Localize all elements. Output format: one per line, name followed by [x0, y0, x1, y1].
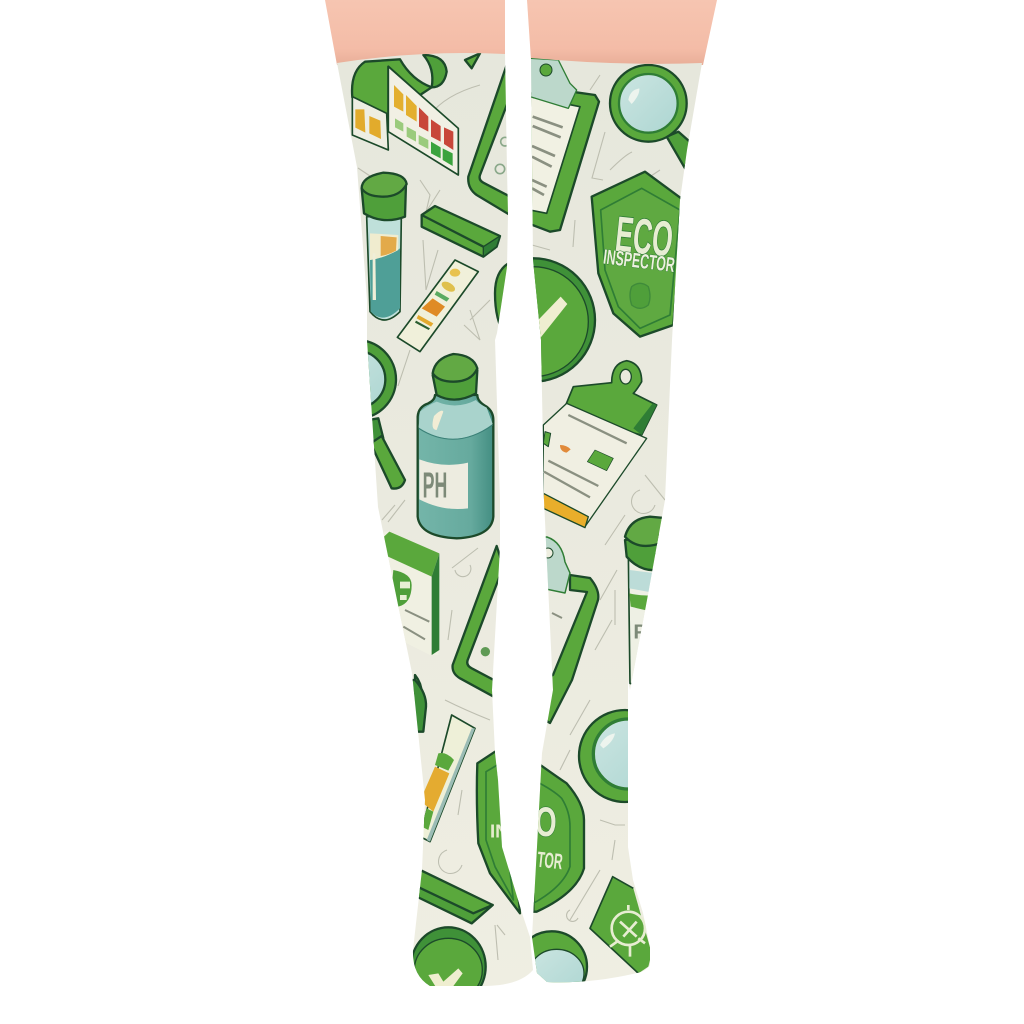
check circle — [412, 926, 487, 986]
green bar — [422, 206, 500, 257]
shield lower text: O — [535, 798, 557, 845]
shield lower right: TOR — [536, 847, 564, 874]
vial lower right — [624, 516, 662, 684]
report card — [384, 532, 439, 655]
left sock — [337, 53, 533, 986]
green crescent left — [410, 680, 426, 732]
shield text fragment: IN — [490, 820, 509, 841]
doodle marks left sock — [358, 85, 505, 960]
right sock — [531, 58, 702, 982]
shield upper: INSPECTOR — [602, 245, 676, 277]
left thigh — [325, 0, 505, 65]
check circle upper — [532, 257, 596, 382]
clipboard upper — [530, 58, 599, 232]
clipboard left half — [468, 65, 510, 215]
dark edge right — [673, 363, 680, 453]
crescent left of centre — [494, 262, 508, 324]
test strip lower — [420, 715, 475, 842]
magnifier at toe — [532, 930, 588, 982]
right thigh — [527, 0, 717, 65]
clipboard report tilted — [543, 361, 657, 528]
colour chart with ribbon — [352, 53, 480, 175]
magnifier left — [367, 340, 406, 490]
vial lower right: P — [633, 620, 647, 643]
magnifier upper — [610, 65, 692, 168]
green bar lower — [413, 870, 493, 923]
hexagon target badge — [590, 877, 652, 973]
clipboard lower left — [415, 546, 503, 698]
test tube — [362, 173, 407, 320]
doodle marks right sock — [532, 75, 665, 921]
shield text: ECO — [613, 206, 676, 268]
shield upper — [592, 172, 683, 337]
magnifier lower — [578, 708, 628, 804]
test strip — [397, 260, 478, 352]
shield lower right — [533, 760, 584, 912]
pH bottle: PH — [423, 464, 447, 505]
shield lower left — [477, 752, 520, 913]
clipboard lower right — [546, 536, 600, 724]
pH bottle — [418, 354, 493, 538]
